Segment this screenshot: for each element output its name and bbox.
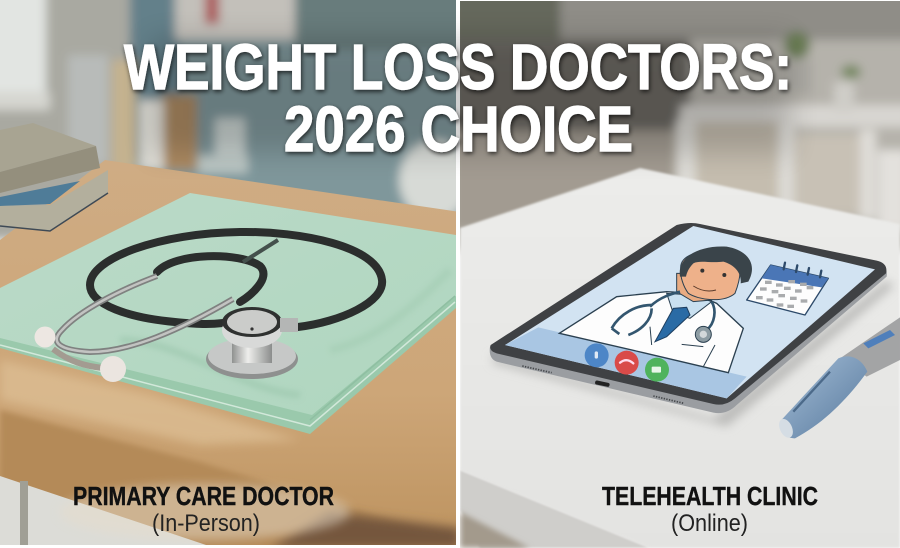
screen bottom bar [505, 327, 747, 398]
floor corner [460, 512, 530, 548]
folded green cloth [0, 193, 456, 434]
label: telehealth clinic: (Online) [671, 510, 748, 537]
label: primary care doctor: PRIMARY CARE DOCTOR [73, 481, 334, 511]
label glow [60, 484, 350, 540]
title backdrop [150, 38, 790, 153]
tablet shadow [492, 280, 893, 427]
wooden table top [0, 160, 460, 548]
dark shadow near table corner [270, 512, 460, 548]
table front edge [460, 470, 650, 548]
tablet screen [505, 226, 875, 398]
blurred office background [450, 0, 900, 250]
table front face [0, 410, 355, 545]
doctor illustration [559, 247, 752, 373]
label: primary care doctor: (In-Person) [152, 510, 260, 537]
chest piece [206, 307, 298, 379]
tablet body [490, 270, 887, 414]
label: primary care doctor [73, 481, 334, 537]
title [124, 31, 792, 165]
injection pen [776, 317, 900, 440]
blurred clinic background [0, 0, 480, 240]
call buttons [585, 343, 669, 382]
label: telehealth clinic [602, 481, 818, 537]
white cabinet doors [0, 476, 215, 548]
calendar icon [747, 263, 828, 315]
wood highlight [0, 360, 300, 445]
title: 2026 CHOICE [284, 93, 633, 165]
tablet [490, 223, 893, 427]
white table top [460, 168, 900, 548]
label: telehealth clinic: TELEHEALTH CLINIC [602, 481, 818, 511]
stethoscope [34, 232, 382, 382]
books [0, 123, 108, 231]
tablet port and speakers [522, 366, 684, 403]
panel: telehealth clinic [450, 0, 900, 548]
panel: primary care doctor [0, 0, 480, 548]
